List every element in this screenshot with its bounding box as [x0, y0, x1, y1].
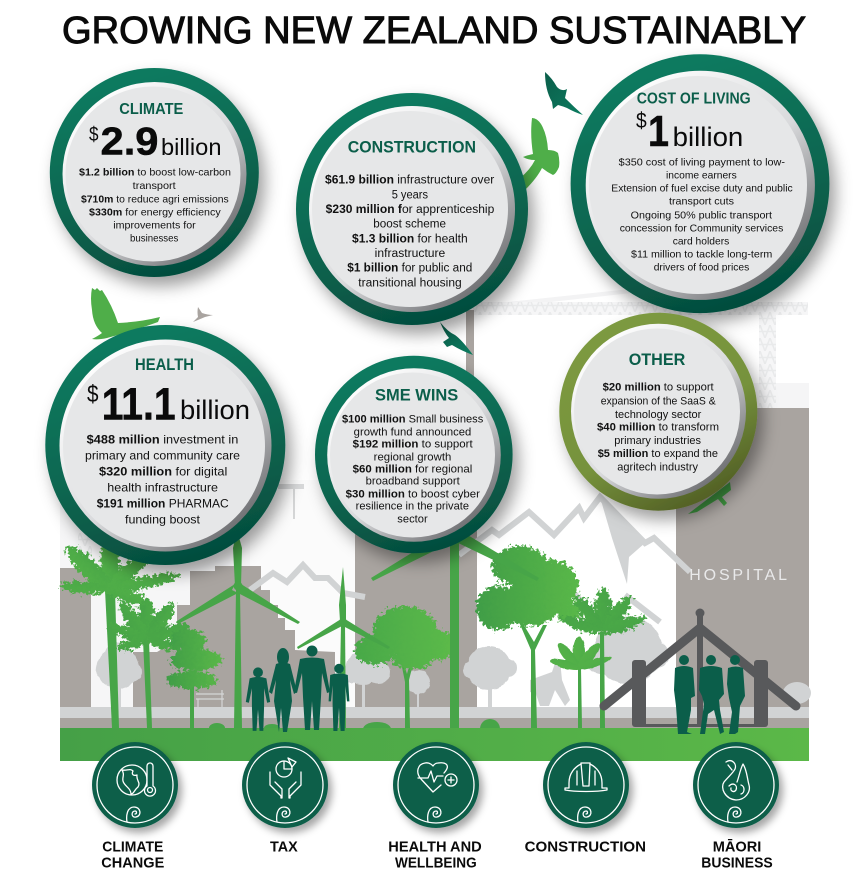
health heading: HEALTH [135, 356, 194, 374]
health amount: $ [87, 381, 98, 408]
construction details: transitional housing [358, 278, 462, 290]
bird: dark below construction [440, 322, 473, 355]
ground band [60, 728, 809, 761]
climate details [79, 167, 231, 245]
sme details: $100 million Small business [342, 414, 484, 426]
crane tower [470, 284, 808, 408]
wind turbines [177, 528, 539, 728]
construction details: infrastructure [375, 248, 445, 260]
construction details: 5 years [392, 189, 428, 201]
other details: agritech industry [617, 461, 698, 473]
city background scene [60, 284, 811, 729]
construction details: $1 billion for public and [347, 263, 472, 275]
other heading: OTHER [629, 350, 685, 369]
heart icon [418, 763, 457, 792]
construction details: $1.3 billion for health [352, 233, 468, 245]
icon badge: tax [242, 742, 328, 828]
climate details: businesses [130, 233, 178, 245]
health details: health infrastructure [107, 480, 218, 494]
sme details: resilience in the private [356, 501, 469, 513]
hospital label: HOSPITAL [689, 567, 787, 584]
bushes [209, 719, 500, 739]
cost of living details: Extension of fuel excise duty and public [611, 183, 793, 195]
other details: $5 million to expand the [598, 448, 718, 460]
climate amount [89, 120, 222, 164]
tree three [167, 629, 222, 728]
other details: expansion of the SaaS & [601, 396, 716, 408]
cost of living heading: COST OF LIVING [637, 90, 751, 107]
globe and thermometer icon [117, 763, 156, 796]
health details: funding boost [125, 512, 201, 526]
wharenui meeting house [604, 608, 796, 727]
sme heading: SME WINS [375, 386, 458, 405]
father [294, 646, 330, 730]
family silhouettes [246, 646, 349, 732]
panel: sme wins [315, 356, 513, 553]
turbine small [297, 567, 390, 728]
badge labels: CONSTRUCTION [525, 839, 646, 856]
palm one [59, 531, 181, 728]
mother [269, 648, 297, 732]
turbine left [177, 530, 300, 728]
cost of living details: drivers of food prices [654, 261, 749, 273]
title: GROWING NEW ZEALAND SUSTAINABLY [62, 10, 806, 52]
bird: green under other [688, 482, 731, 514]
trees [59, 531, 647, 739]
pale trees [96, 616, 811, 707]
hard hat icon [565, 763, 607, 792]
sme details: broadband support [366, 476, 460, 488]
construction details [325, 174, 494, 290]
palm six [559, 588, 647, 728]
health amount [87, 378, 250, 429]
construction details: boost scheme [373, 219, 446, 231]
road [60, 707, 809, 718]
construction heading: CONSTRUCTION [348, 138, 476, 157]
hands and pie chart icon [270, 758, 301, 798]
construction details: $230 million f or apprenticeship [326, 204, 494, 216]
bench [196, 690, 224, 707]
health details: $191 million PHARMAC [97, 496, 229, 510]
hei matau icon [723, 761, 749, 800]
badge labels [101, 839, 773, 872]
panel: construction [296, 93, 528, 325]
icon badge: health and wellbeing [393, 742, 479, 828]
badge labels: CLIMATE [102, 839, 163, 856]
other details: $20 million to support [603, 382, 714, 394]
climate details: transport [133, 180, 176, 192]
climate amount: $ [89, 124, 98, 146]
health amount: 11.1 [102, 378, 176, 429]
sme details: $60 million for regional [353, 463, 472, 475]
health details [85, 432, 240, 526]
health amount: billion [180, 395, 250, 425]
bird: dark top [545, 72, 583, 115]
palm five [549, 637, 613, 728]
other details: primary industries [614, 435, 701, 447]
climate details: $710m to reduce agri emissions [81, 193, 229, 205]
icon badge: climate change [92, 742, 178, 828]
child two [329, 664, 349, 731]
sme details: $30 million to boost cyber [346, 488, 480, 500]
badge labels: HEALTH AND [388, 839, 482, 856]
panel: climate [50, 68, 259, 277]
climate details: $1.2 billion to boost low-carbon [79, 167, 231, 179]
tree four [355, 606, 456, 728]
small crane [278, 484, 304, 519]
central tower pole [466, 310, 474, 380]
badge labels: CHANGE [101, 855, 164, 872]
health details: $488 million investment in [87, 432, 238, 446]
icon badge: construction [543, 742, 629, 828]
sme details: growth fund announced [354, 426, 471, 438]
climate amount: 2.9 [100, 120, 158, 164]
left lattice [78, 530, 92, 582]
child one [246, 667, 270, 731]
badge labels: WELLBEING [395, 855, 477, 872]
panel: cost of living [571, 54, 829, 313]
sme details: sector [397, 513, 428, 525]
cost of living details: transport cuts [669, 196, 734, 208]
badge labels: TAX [270, 839, 298, 856]
cost of living amount: 1 [648, 107, 669, 156]
health details: $320 million for digital [99, 464, 227, 478]
mountains [250, 497, 690, 622]
bird: green health [91, 288, 160, 339]
cost of living details: $350 cost of living payment to low- [619, 157, 786, 169]
cost of living details: income earners [666, 170, 737, 182]
cost of living amount: $ [636, 108, 647, 133]
bird: small grey [193, 307, 213, 322]
cost of living details [611, 157, 793, 273]
palm two [107, 598, 191, 728]
sme details: $192 million to support [353, 439, 473, 451]
bird: green top [520, 118, 559, 190]
other details: $40 million to transform [597, 422, 719, 434]
cost of living details: concession for Community services [620, 223, 783, 235]
badge labels: BUSINESS [701, 855, 773, 872]
cost of living details: card holders [673, 236, 729, 248]
cost of living details: $11 million to tackle long-term [631, 248, 773, 260]
climate details: $330m for energy efficiency [89, 207, 221, 219]
three people silhouettes [674, 655, 745, 734]
cost of living amount: billion [673, 122, 743, 152]
climate amount: billion [161, 134, 222, 160]
cost of living amount [636, 107, 743, 156]
sme details [342, 414, 484, 525]
panel: health [45, 325, 285, 565]
other details: technology sector [615, 409, 702, 421]
buildings [60, 408, 809, 707]
sme details: regional growth [374, 451, 451, 463]
panel: other [559, 313, 757, 511]
big tree [476, 546, 579, 728]
other details [597, 382, 719, 473]
health details: primary and community care [85, 448, 240, 462]
climate details: improvements for [113, 219, 196, 231]
turbine centre [371, 528, 539, 728]
icon badge: maori business [693, 742, 779, 828]
cost of living details: Ongoing 50% public transport [631, 209, 772, 221]
badge labels: MĀORI [713, 839, 761, 856]
construction details: $61.9 billion infrastructure over [325, 174, 494, 186]
climate heading: CLIMATE [119, 101, 184, 118]
